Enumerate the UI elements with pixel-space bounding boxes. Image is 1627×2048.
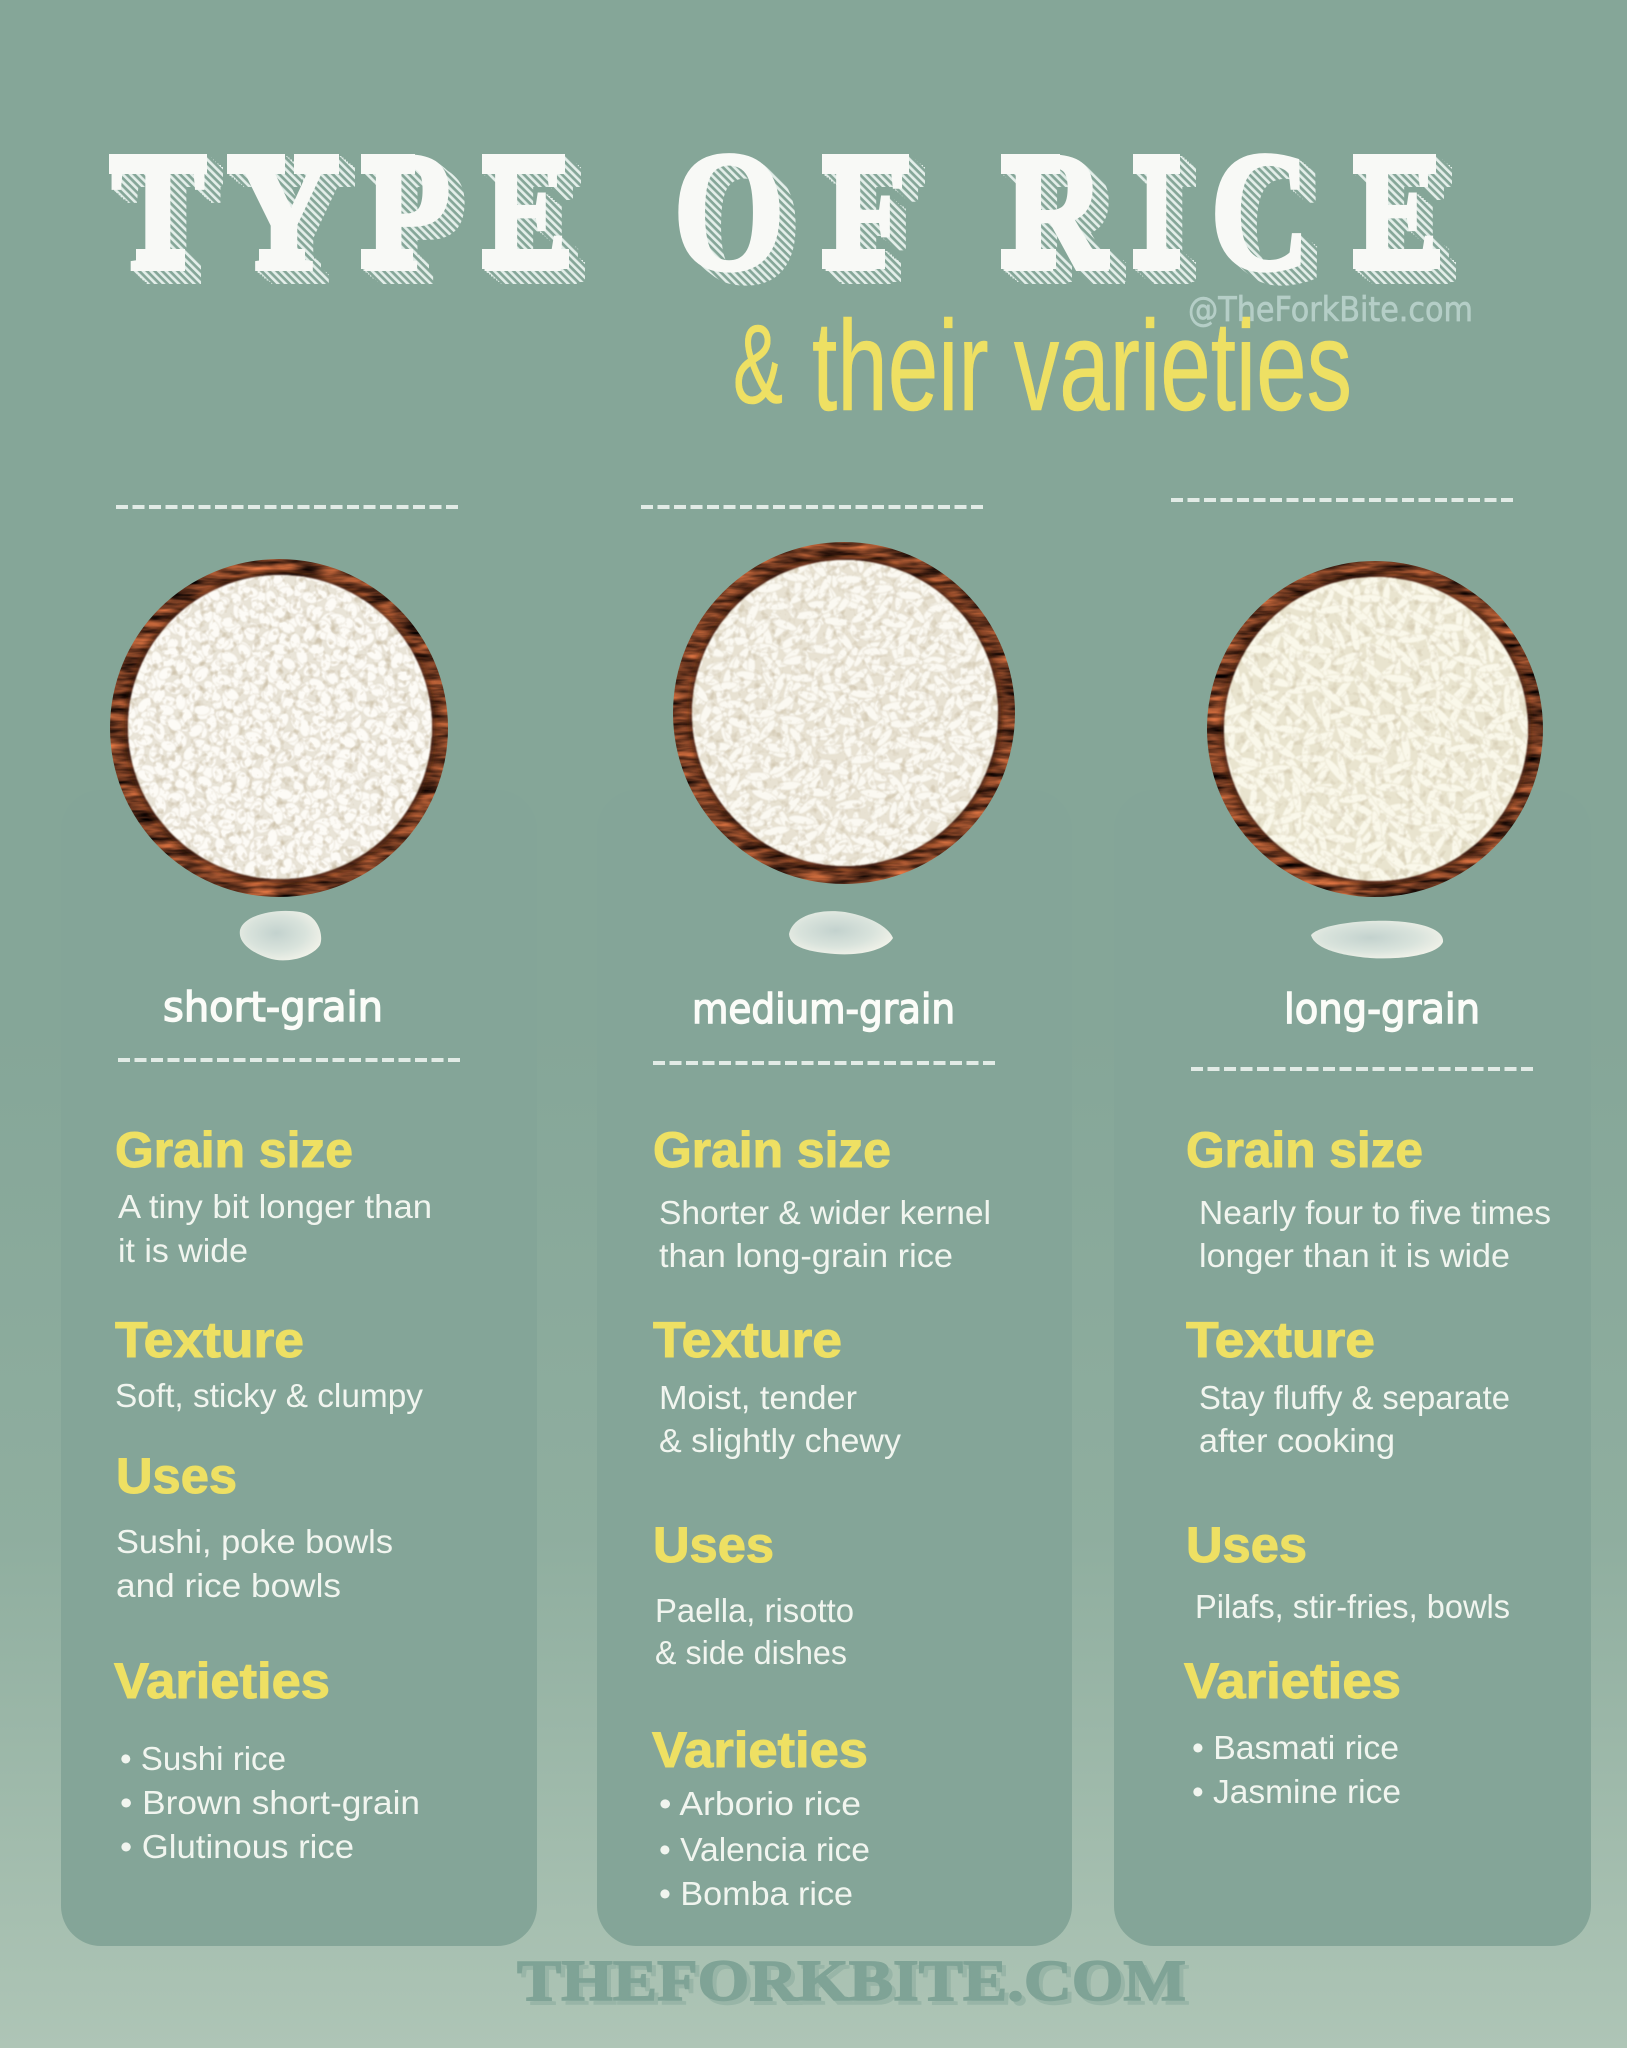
uses: Paella, risotto [655,1592,854,1629]
grain size: Grain size [115,1122,353,1178]
uses: Uses [653,1517,774,1573]
footer brand: THEFORKBITE.COM [517,1948,1186,2013]
texture [1186,1312,1510,1459]
texture [653,1312,902,1459]
watermark: @TheForkBite.com [1188,290,1473,330]
grain size: A tiny bit longer than [118,1188,432,1225]
uses [653,1517,854,1671]
grain size: than long-grain rice [659,1237,953,1274]
varieties: Varieties [652,1722,868,1778]
uses: & side dishes [655,1634,847,1671]
varieties [114,1653,420,1865]
uses [116,1448,393,1604]
title lettering: Y [229,117,337,307]
grain size [115,1122,432,1269]
title [109,153,1456,286]
title hatched extrusion [114,156,1456,286]
short-grain label: short-grain [163,983,383,1031]
varieties [652,1722,870,1912]
icon: medium rice grain [789,911,893,954]
varieties: Varieties [1184,1653,1401,1709]
column 3: long-grain [1171,500,1551,1810]
grain size: Grain size [1186,1122,1423,1178]
icon: long rice grain [1311,921,1443,958]
title lettering: F [824,117,907,307]
uses [1186,1517,1510,1625]
uses: Uses [1186,1517,1307,1573]
varieties: • Basmati rice [1192,1729,1399,1766]
uses: Pilafs, stir-fries, bowls [1195,1588,1510,1625]
texture: Texture [653,1312,842,1368]
texture [115,1312,423,1414]
icon: bowl of short-grain rice [110,559,448,897]
title lettering: I [1135,117,1178,307]
varieties: • Sushi rice [120,1740,286,1777]
title lettering [109,117,1440,307]
long-grain label: long-grain [1284,985,1480,1033]
varieties: • Bomba rice [659,1875,853,1912]
title lettering: E [484,117,567,307]
texture: & slightly chewy [659,1422,902,1459]
title lettering: O [673,117,785,307]
medium-grain label: medium-grain [692,985,955,1033]
varieties: • Arborio rice [659,1785,861,1822]
panel: short-grain card [61,790,537,1946]
title lettering: C [1210,117,1310,307]
column 2: medium-grain [641,507,1015,1912]
grain size: longer than it is wide [1199,1237,1510,1274]
grain size: Grain size [653,1122,891,1178]
grain size: it is wide [118,1232,248,1269]
texture: Soft, sticky & clumpy [115,1377,423,1414]
uses: and rice bowls [116,1567,341,1604]
texture: after cooking [1199,1422,1395,1459]
subtitle: & [733,302,783,427]
panel: long-grain card [1114,790,1591,1946]
varieties: Varieties [114,1653,330,1709]
varieties: • Brown short-grain [120,1784,420,1821]
grain size: Nearly four to five times [1199,1194,1551,1231]
grain size [1186,1122,1551,1274]
varieties: • Valencia rice [659,1831,870,1868]
title lettering: R [1003,117,1107,307]
varieties: • Jasmine rice [1192,1773,1401,1810]
texture: Stay fluffy & separate [1199,1379,1510,1416]
column 1: short-grain [110,507,461,1865]
title lettering: P [363,117,451,307]
subtitle [733,295,1352,438]
subtitle: their varieties [812,295,1352,438]
texture: Moist, tender [659,1379,857,1416]
texture: Texture [1186,1312,1375,1368]
title lettering: E [1355,117,1438,307]
texture: Texture [115,1312,304,1368]
varieties [1184,1653,1401,1810]
varieties: • Glutinous rice [120,1828,354,1865]
panel: medium-grain card [597,790,1072,1946]
icon: bowl of medium-grain rice [673,542,1015,884]
icon: short rice grain [240,911,321,960]
grain size: Shorter & wider kernel [659,1194,991,1231]
uses: Uses [116,1448,237,1504]
footer brand: THEFORKBITE.COM [521,1952,1190,2017]
icon: bowl of long-grain rice [1207,561,1543,897]
grain size [653,1122,991,1274]
uses: Sushi, poke bowls [116,1523,393,1560]
title lettering: T [111,117,205,307]
